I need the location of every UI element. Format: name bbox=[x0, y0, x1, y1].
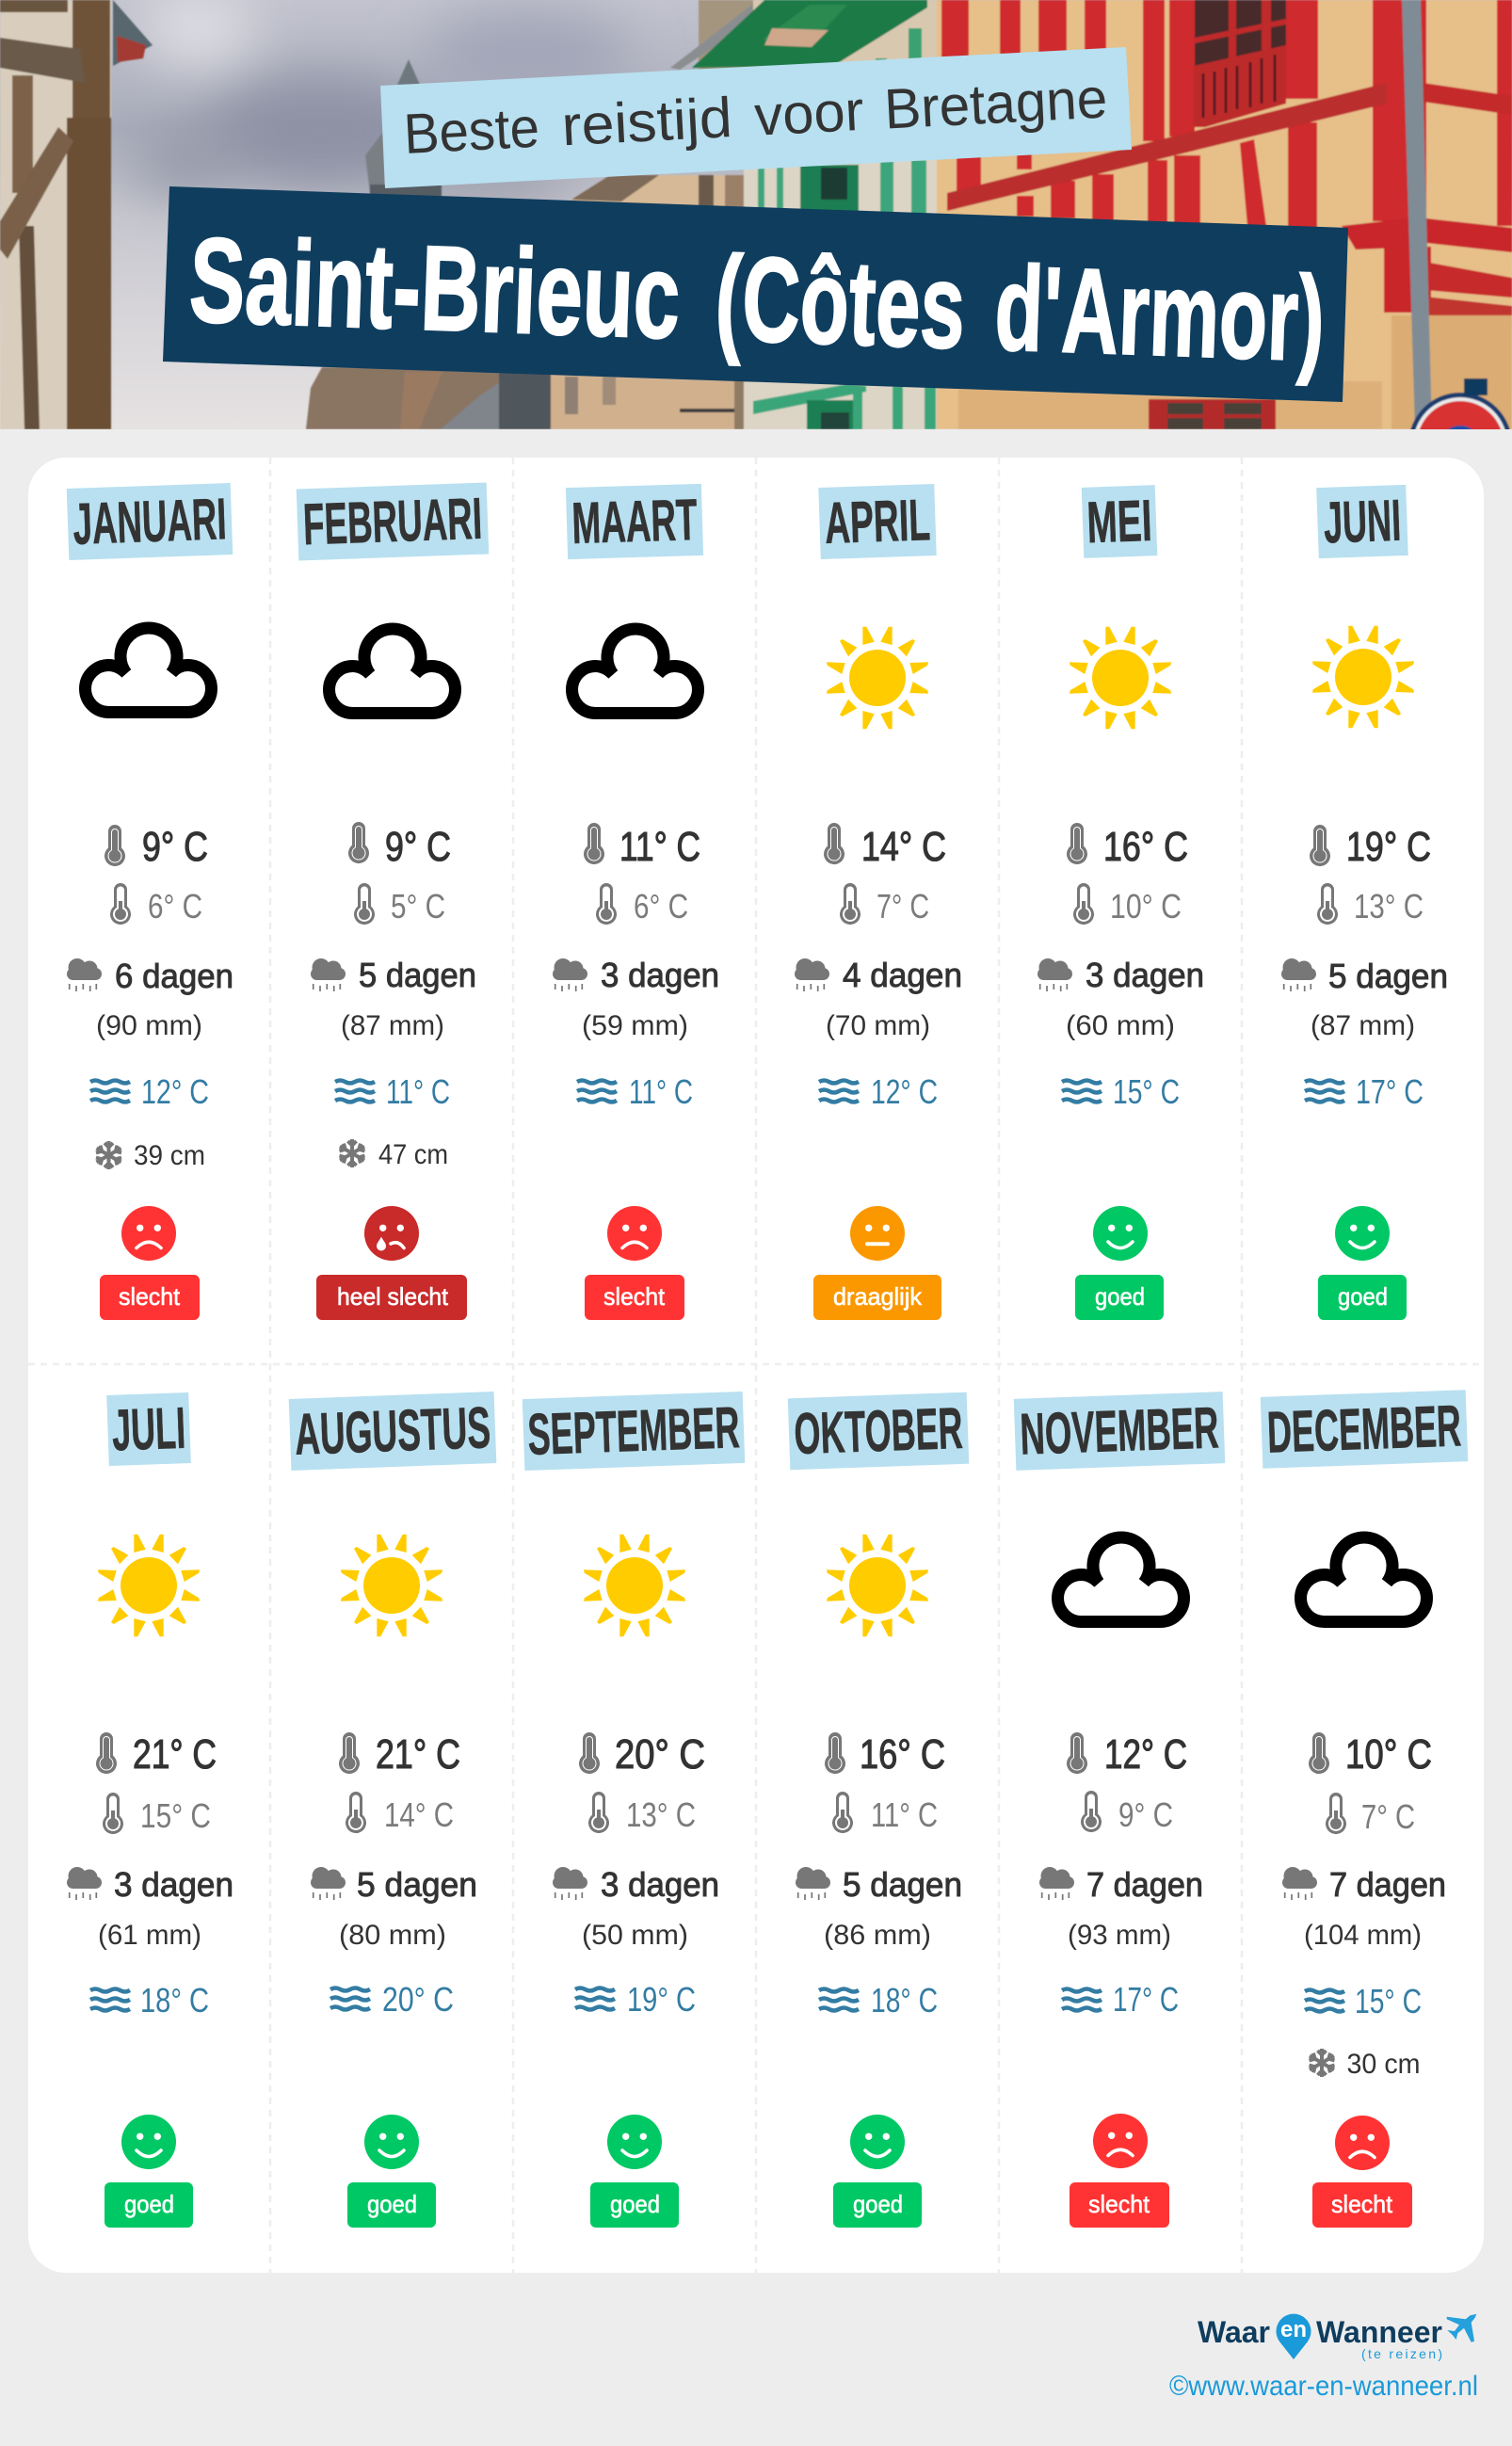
sea temperature: 19° C bbox=[627, 1980, 696, 2019]
subtitle banner: Bretagne bbox=[883, 66, 1109, 141]
icon: sun bbox=[827, 627, 928, 729]
panel: climate table card bbox=[28, 458, 1484, 2273]
min temperature bbox=[354, 883, 445, 925]
precipitation: (61 mm) bbox=[98, 1920, 201, 1951]
month heading bbox=[818, 484, 937, 559]
stone building bottom middle bbox=[306, 367, 499, 429]
road sign bbox=[1408, 393, 1512, 496]
min temperature bbox=[346, 1792, 454, 1834]
icon: sun bbox=[1070, 627, 1171, 729]
logo: Waar en Wanneer: (te reizen) bbox=[1361, 2346, 1442, 2361]
icon: sun bbox=[341, 1535, 442, 1636]
max temperature bbox=[339, 1731, 460, 1778]
snow depth bbox=[338, 1139, 448, 1170]
panel: oktober bbox=[788, 1392, 969, 2228]
panel: december bbox=[1261, 1390, 1468, 2228]
month heading: FEBRUARI bbox=[302, 487, 483, 557]
min temperature: 6° C bbox=[634, 887, 688, 925]
min temperature: 6° C bbox=[148, 887, 202, 925]
icon: airplane bbox=[1447, 2314, 1476, 2342]
title banner: Saint-Brieuc bbox=[187, 213, 683, 364]
rain days: 4 dagen bbox=[843, 956, 962, 994]
icon: sun bbox=[584, 1535, 685, 1636]
month heading: AUGUSTUS bbox=[294, 1395, 491, 1468]
sea temperature bbox=[335, 1072, 450, 1111]
precipitation: (50 mm) bbox=[582, 1920, 688, 1951]
rain days: 3 dagen bbox=[114, 1865, 233, 1904]
rating: goed: goed bbox=[610, 2190, 660, 2218]
min temperature: 13° C bbox=[1354, 887, 1424, 925]
max temperature bbox=[1067, 1731, 1187, 1778]
max temperature bbox=[348, 822, 451, 870]
rain days: 3 dagen bbox=[1086, 956, 1204, 994]
month heading bbox=[106, 1392, 191, 1466]
rain days: 7 dagen bbox=[1086, 1865, 1203, 1904]
max temperature: 16° C bbox=[860, 1731, 945, 1778]
max temperature bbox=[1067, 823, 1188, 870]
rating: goed: goed bbox=[1095, 1282, 1145, 1311]
month heading bbox=[566, 484, 703, 559]
drain pipe bbox=[1402, 0, 1432, 429]
min temperature bbox=[1326, 1793, 1415, 1836]
rain days bbox=[67, 957, 233, 995]
rating: slecht bbox=[585, 1206, 684, 1320]
rain days bbox=[1282, 1865, 1446, 1904]
panel: september bbox=[523, 1392, 745, 2228]
rating: goed bbox=[105, 2115, 193, 2228]
rain days: 5 dagen bbox=[1328, 957, 1448, 995]
rating: slecht bbox=[1312, 2116, 1412, 2228]
rating: goed: goed bbox=[1338, 1282, 1388, 1311]
rating: slecht: slecht bbox=[603, 1282, 666, 1311]
max temperature: 14° C bbox=[861, 824, 946, 870]
title banner bbox=[163, 186, 1348, 402]
logo: Waar en Wanneer: en bbox=[1280, 2317, 1307, 2342]
month heading bbox=[788, 1392, 969, 1470]
green house below banner bbox=[744, 381, 958, 429]
main red half-timbered house bbox=[937, 0, 1512, 429]
month heading: JUNI bbox=[1323, 489, 1402, 555]
month heading: MAART bbox=[571, 488, 699, 556]
sea temperature bbox=[819, 1072, 938, 1111]
min temperature: 5° C bbox=[391, 887, 445, 925]
rating: goed bbox=[833, 2115, 922, 2228]
max temperature bbox=[584, 823, 700, 870]
rating: draaglijk: draaglijk bbox=[833, 1282, 923, 1311]
rain days: 5 dagen bbox=[359, 956, 476, 994]
sea temperature: 17° C bbox=[1356, 1072, 1424, 1111]
max temperature: 9° C bbox=[142, 824, 208, 870]
stone tower and gutter bbox=[699, 0, 755, 73]
sea temperature: 11° C bbox=[629, 1072, 693, 1111]
max temperature: 21° C bbox=[133, 1731, 217, 1778]
min temperature: 9° C bbox=[1118, 1795, 1173, 1834]
max temperature bbox=[824, 823, 946, 870]
left half-timbered house bbox=[0, 0, 111, 429]
min temperature: 14° C bbox=[384, 1795, 454, 1834]
sea temperature bbox=[90, 1072, 209, 1111]
max temperature bbox=[1310, 824, 1431, 870]
snow depth bbox=[94, 1140, 205, 1171]
icon: cloud bbox=[572, 629, 698, 714]
sea temperature: 12° C bbox=[141, 1072, 209, 1111]
min temperature: 11° C bbox=[871, 1795, 938, 1834]
sea temperature: 15° C bbox=[1113, 1072, 1180, 1111]
sea temperature bbox=[575, 1980, 696, 2019]
rain days: 7 dagen bbox=[1329, 1865, 1446, 1904]
snow depth: 30 cm bbox=[1346, 2049, 1420, 2080]
min temperature: 15° C bbox=[140, 1796, 211, 1835]
month heading bbox=[297, 482, 489, 561]
snow depth: 39 cm bbox=[134, 1140, 205, 1171]
precipitation: (80 mm) bbox=[339, 1920, 446, 1951]
precipitation: (59 mm) bbox=[582, 1010, 688, 1041]
rating: goed bbox=[1318, 1206, 1407, 1320]
panel: juli bbox=[67, 1392, 233, 2228]
rating: goed bbox=[347, 2115, 436, 2228]
rating: goed: goed bbox=[367, 2190, 417, 2218]
min temperature bbox=[103, 1793, 211, 1835]
logo: Waar en Wanneer: Waar bbox=[1198, 2315, 1270, 2349]
sea temperature bbox=[577, 1072, 693, 1111]
panel: mei bbox=[1037, 485, 1204, 1320]
rating: slecht bbox=[100, 1206, 200, 1320]
rain days: 6 dagen bbox=[115, 957, 233, 995]
green eaves and white wall bbox=[753, 0, 937, 75]
precipitation: (93 mm) bbox=[1068, 1920, 1171, 1951]
min temperature bbox=[1081, 1791, 1173, 1834]
min temperature bbox=[840, 883, 929, 925]
icon: cloud bbox=[1301, 1537, 1426, 1621]
rain days bbox=[311, 956, 476, 994]
rain days bbox=[1039, 1865, 1203, 1904]
steeple bbox=[397, 59, 420, 85]
min temperature: 7° C bbox=[877, 887, 929, 925]
min temperature bbox=[832, 1792, 938, 1834]
rating: goed bbox=[590, 2115, 679, 2228]
snow depth: 47 cm bbox=[378, 1139, 448, 1170]
panel: maart bbox=[553, 484, 719, 1320]
sea temperature: 18° C bbox=[140, 1981, 209, 2020]
panel: februari bbox=[297, 482, 489, 1320]
subtitle banner: voor bbox=[753, 79, 865, 148]
sea temperature bbox=[1305, 1982, 1422, 2020]
beige house between banners bbox=[571, 175, 725, 206]
max temperature: 12° C bbox=[1104, 1731, 1187, 1778]
precipitation: (60 mm) bbox=[1066, 1010, 1175, 1041]
icon: sun bbox=[827, 1535, 928, 1636]
month heading bbox=[67, 483, 233, 560]
rating: draaglijk bbox=[813, 1206, 941, 1320]
max temperature bbox=[96, 1731, 217, 1778]
max temperature: 21° C bbox=[376, 1731, 460, 1778]
min temperature bbox=[110, 883, 202, 925]
rating: goed bbox=[1075, 1206, 1164, 1320]
max temperature bbox=[1309, 1731, 1432, 1778]
min temperature bbox=[1073, 883, 1182, 925]
min temperature bbox=[1317, 883, 1424, 925]
sea temperature bbox=[1305, 1072, 1424, 1111]
sea temperature: 20° C bbox=[382, 1980, 454, 2019]
precipitation: (104 mm) bbox=[1304, 1920, 1422, 1951]
rating: slecht bbox=[1070, 2114, 1169, 2228]
sea temperature: 17° C bbox=[1113, 1980, 1179, 2019]
website credit: ©www.waar-en-wanneer.nl bbox=[1169, 2371, 1478, 2402]
panel: april bbox=[795, 484, 962, 1320]
month heading: OKTOBER bbox=[793, 1396, 964, 1467]
subtitle banner: Beste bbox=[402, 96, 540, 166]
logo: Waar en Wanneer: Wanneer bbox=[1316, 2315, 1442, 2349]
min temperature: 10° C bbox=[1110, 887, 1182, 925]
max temperature: 20° C bbox=[615, 1731, 705, 1778]
month heading: NOVEMBER bbox=[1019, 1395, 1220, 1468]
month heading bbox=[1082, 485, 1157, 558]
sea temperature: 15° C bbox=[1355, 1982, 1422, 2020]
month heading bbox=[1014, 1392, 1225, 1471]
rating: goed: goed bbox=[124, 2190, 174, 2218]
month heading: MEI bbox=[1086, 489, 1153, 555]
min temperature: 13° C bbox=[626, 1795, 696, 1834]
rain days: 5 dagen bbox=[357, 1865, 477, 1904]
panel: november bbox=[1014, 1392, 1225, 2228]
rain days: 3 dagen bbox=[601, 956, 719, 994]
precipitation: (90 mm) bbox=[96, 1010, 202, 1041]
icon: map pin bbox=[1277, 2314, 1311, 2359]
min temperature bbox=[588, 1792, 696, 1834]
icon: sun bbox=[98, 1535, 200, 1636]
panel: januari bbox=[67, 483, 233, 1320]
subtitle banner bbox=[380, 47, 1132, 188]
sea temperature bbox=[330, 1980, 454, 2019]
snow depth bbox=[1308, 2049, 1420, 2080]
rating: slecht: slecht bbox=[1331, 2190, 1393, 2218]
rain days: 5 dagen bbox=[843, 1865, 962, 1904]
month heading: JANUARI bbox=[72, 487, 228, 557]
icon: sun bbox=[1312, 626, 1414, 728]
month heading bbox=[523, 1392, 745, 1471]
panel: juni bbox=[1281, 485, 1448, 1320]
month heading: SEPTEMBER bbox=[526, 1395, 741, 1468]
rating: heel slecht bbox=[316, 1206, 467, 1320]
sea temperature bbox=[1062, 1072, 1180, 1111]
precipitation: (70 mm) bbox=[826, 1010, 930, 1041]
title banner: d'Armor) bbox=[993, 241, 1327, 387]
sea temperature bbox=[819, 1981, 938, 2020]
icon: cloud bbox=[86, 628, 211, 712]
rating: slecht: slecht bbox=[1088, 2190, 1150, 2218]
rating: slecht: slecht bbox=[119, 1282, 181, 1311]
precipitation: (87 mm) bbox=[1311, 1010, 1415, 1041]
subtitle banner: reistijd bbox=[560, 86, 733, 157]
rain days: 3 dagen bbox=[601, 1865, 719, 1904]
max temperature: 11° C bbox=[619, 824, 700, 870]
max temperature: 10° C bbox=[1345, 1731, 1432, 1778]
rain days bbox=[553, 956, 719, 994]
month heading: JULI bbox=[111, 1396, 186, 1463]
sea temperature: 11° C bbox=[386, 1072, 450, 1111]
precipitation: (86 mm) bbox=[824, 1920, 931, 1951]
sea temperature: 18° C bbox=[871, 1981, 938, 2020]
rating: heel slecht: heel slecht bbox=[337, 1282, 449, 1311]
title banner: (Côtes bbox=[714, 232, 968, 375]
min temperature bbox=[596, 883, 688, 925]
max temperature bbox=[105, 824, 208, 870]
panel: augustus bbox=[289, 1392, 496, 2228]
sea temperature bbox=[90, 1981, 209, 2020]
min temperature: 7° C bbox=[1361, 1797, 1415, 1836]
rain days bbox=[1037, 956, 1204, 994]
header photo: half-timbered street bbox=[0, 0, 1512, 429]
icon: cloud bbox=[1058, 1537, 1183, 1621]
month heading bbox=[1316, 485, 1408, 558]
max temperature: 16° C bbox=[1103, 824, 1188, 870]
max temperature: 9° C bbox=[385, 824, 451, 870]
month heading: APRIL bbox=[824, 488, 931, 556]
rating: goed: goed bbox=[853, 2190, 903, 2218]
precipitation: (87 mm) bbox=[341, 1010, 444, 1041]
sea temperature bbox=[1062, 1980, 1179, 2019]
logo: Waar en Wanneer bbox=[1198, 2314, 1476, 2361]
month heading bbox=[289, 1392, 496, 1471]
max temperature: 19° C bbox=[1346, 824, 1431, 870]
green house between banners bbox=[743, 160, 938, 213]
rain days bbox=[553, 1865, 719, 1904]
sea temperature: 12° C bbox=[871, 1072, 938, 1111]
max temperature bbox=[579, 1731, 705, 1778]
max temperature bbox=[825, 1731, 945, 1778]
icon: cloud bbox=[330, 629, 455, 714]
